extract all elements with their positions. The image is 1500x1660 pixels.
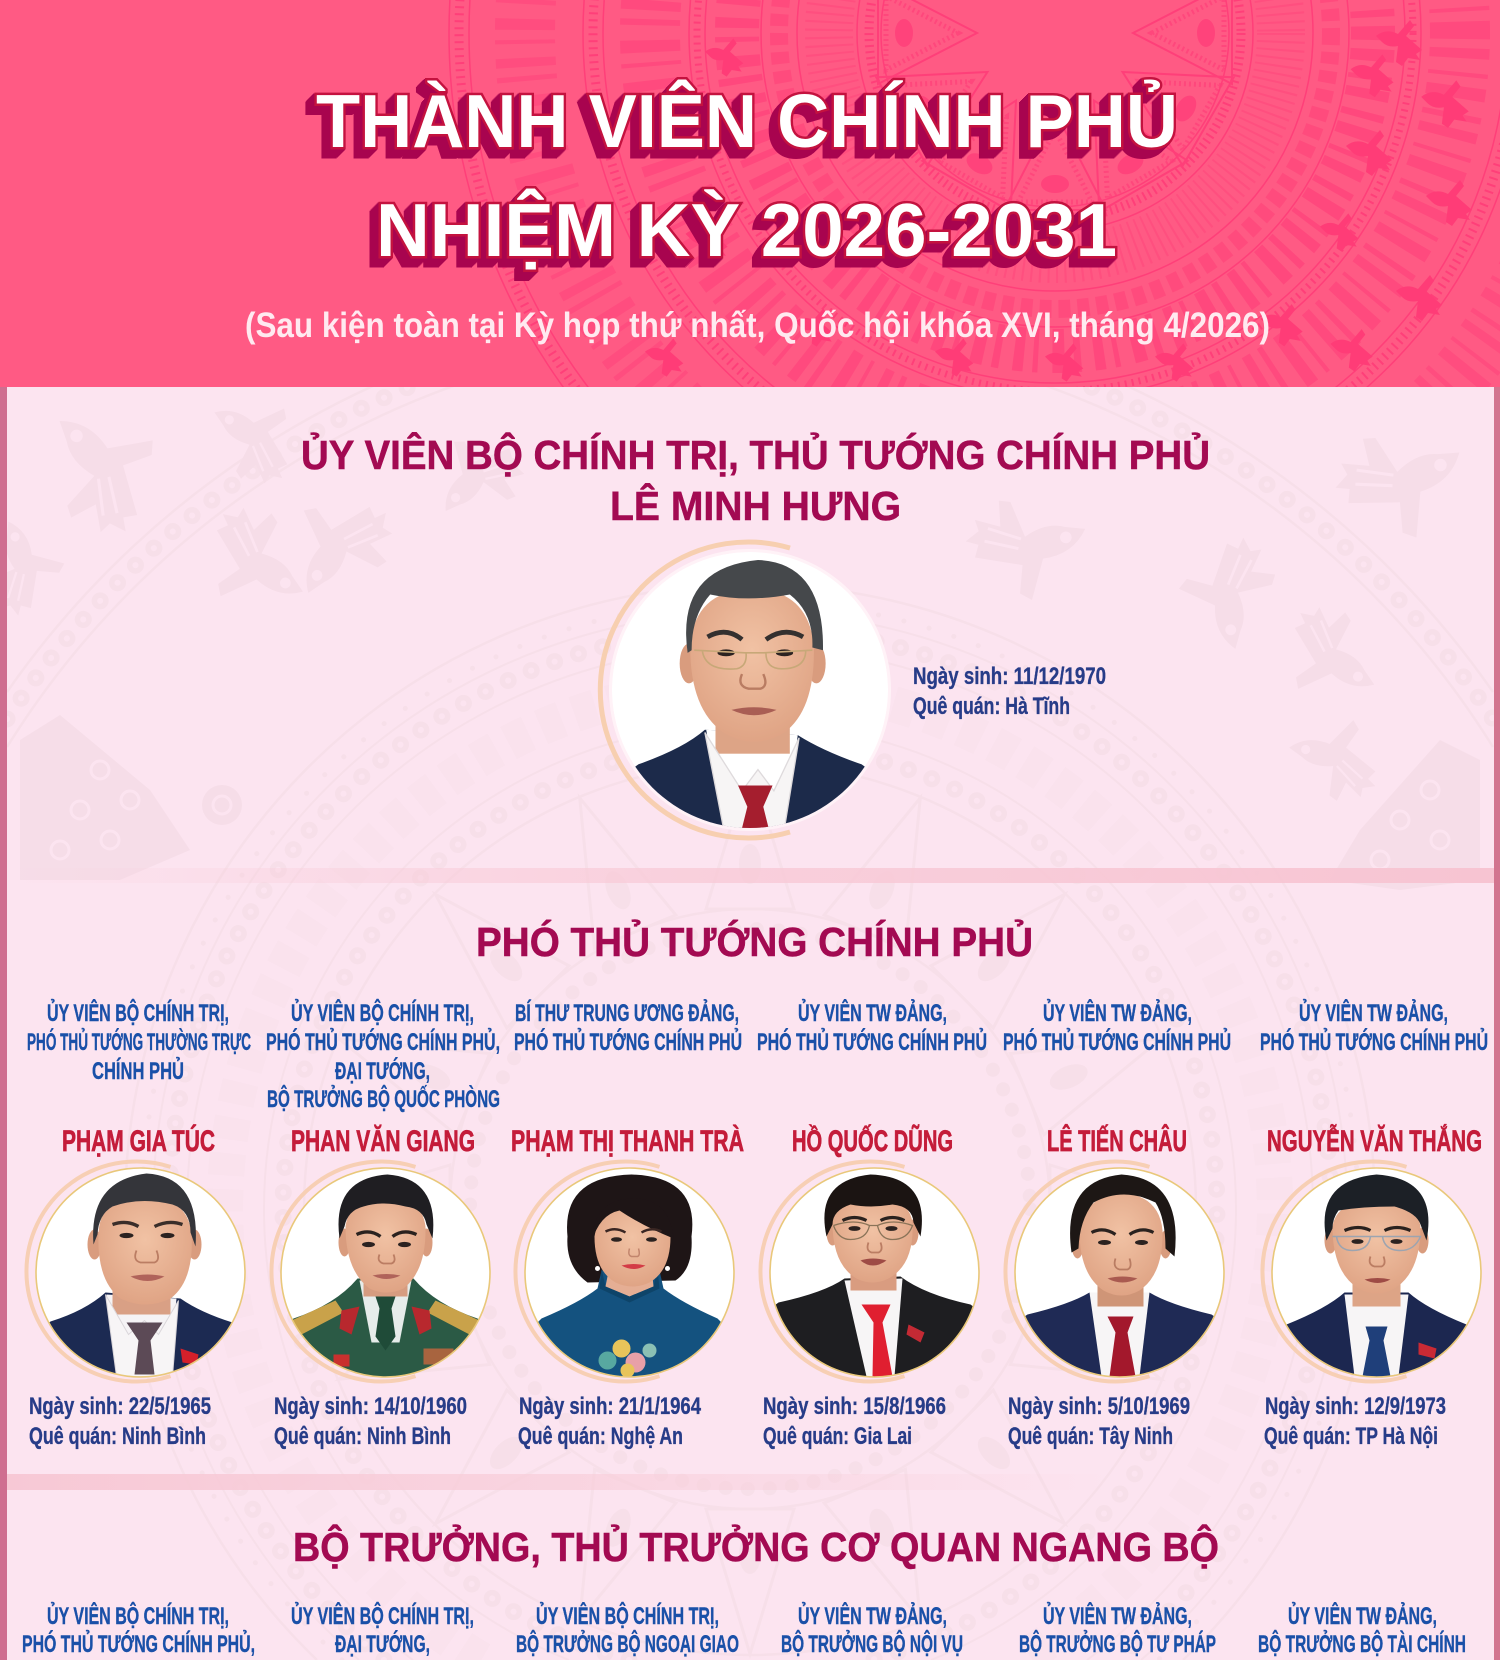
role: minister column 5: BỘ TRƯỞNG BỘ TƯ PHÁP [1019,1629,1216,1658]
role: minister column 4 [781,1601,963,1658]
role: minister column 5: ỦY VIÊN TW ĐẢNG, [1043,1601,1192,1630]
name: PHẠM GIA TÚC [62,1124,215,1158]
role: minister column 2: ĐẠI TƯỚNG, [335,1630,430,1658]
title [316,79,1178,272]
member: Phan Văn Giang [266,998,500,1450]
role: minister column 4: BỘ TRƯỞNG BỘ NỘI VỤ [781,1629,963,1658]
member: Phạm Thị Thanh Trà [511,998,744,1450]
role: minister column 2 [291,1601,474,1658]
role: minister column 6 [1258,1601,1466,1658]
role: minister column 3: BỘ TRƯỞNG BỘ NGOẠI GIAO [516,1629,739,1658]
birth and hometown [29,1393,211,1450]
panel: header background [0,0,1500,387]
birth and hometown: Quê quán: Nghệ An [518,1423,683,1450]
role text: ỦY VIÊN TW ĐẢNG, [798,998,947,1027]
birth and hometown: Ngày sinh: 15/8/1966 [763,1393,946,1420]
role text [27,998,251,1085]
portrait [26,1162,245,1382]
birth and hometown: Ngày sinh: 21/1/1964 [519,1393,701,1420]
role text: PHÓ THỦ TƯỚNG CHÍNH PHỦ [757,1027,987,1056]
portrait [760,1162,979,1382]
role: minister column 1: PHÓ THỦ TƯỚNG CHÍNH PHỦ, [22,1629,255,1658]
birth and hometown: Quê quán: Ninh Bình [274,1423,451,1450]
role text: PHÓ THỦ TƯỚNG CHÍNH PHỦ [514,1027,742,1056]
name: PHAN VĂN GIANG [291,1124,475,1158]
heading: ministers: BỘ TRƯỞNG, THỦ TRƯỞNG CƠ QUAN NGANG BỘ [293,1524,1219,1570]
heading: prime minister [301,432,1210,529]
role text [1003,998,1231,1056]
birth and hometown [274,1393,467,1450]
role: minister column 3: ỦY VIÊN BỘ CHÍNH TRỊ, [536,1601,719,1630]
role text: CHÍNH PHỦ [92,1056,184,1085]
role text: ỦY VIÊN BỘ CHÍNH TRỊ, [291,998,474,1027]
role: minister column 2: ỦY VIÊN BỘ CHÍNH TRỊ, [291,1601,474,1630]
role text: ỦY VIÊN TW ĐẢNG, [1043,998,1192,1027]
role text [757,998,987,1056]
info: Lê Minh Hưng [913,663,1106,720]
birth and hometown: Quê quán: Tây Ninh [1008,1423,1173,1450]
birth and hometown: Ngày sinh: 22/5/1965 [29,1393,211,1420]
role: minister column 1: ỦY VIÊN BỘ CHÍNH TRỊ, [47,1601,229,1630]
role: minister column 3 [516,1601,739,1658]
role text [514,998,742,1056]
portrait [271,1162,490,1382]
portrait [515,1162,734,1382]
subtitle: (Sau kiện toàn tại Kỳ họp thứ nhất, Quốc hội khóa XVI, tháng 4/2026) [245,306,1270,345]
role: minister column 1 [22,1601,255,1658]
name: PHẠM THỊ THANH TRÀ [511,1124,744,1158]
role text [266,998,500,1113]
title: THÀNH VIÊN CHÍNH PHỦ [316,79,1178,163]
heading: deputy prime ministers: PHÓ THỦ TƯỚNG CHÍNH PHỦ [476,919,1033,965]
role text: ĐẠI TƯỚNG, [335,1057,430,1085]
portrait [1262,1162,1481,1382]
info: Lê Minh Hưng: Quê quán: Hà Tĩnh [913,693,1070,720]
birth and hometown: Ngày sinh: 5/10/1969 [1008,1393,1190,1420]
role text: BỘ TRƯỞNG BỘ QUỐC PHÒNG [267,1084,500,1113]
info: Lê Minh Hưng: Ngày sinh: 11/12/1970 [913,663,1106,690]
portrait: Lê Minh Hưng [600,542,891,838]
role: minister column 5 [1019,1601,1216,1658]
role text: PHÓ THỦ TƯỚNG THƯỜNG TRỰC [27,1027,251,1056]
role text: PHÓ THỦ TƯỚNG CHÍNH PHỦ, [266,1027,500,1056]
name: HỒ QUỐC DŨNG [792,1124,953,1158]
birth and hometown: Quê quán: Gia Lai [763,1423,912,1450]
name: LÊ TIẾN CHÂU [1047,1124,1187,1158]
role text: ỦY VIÊN BỘ CHÍNH TRỊ, [47,998,229,1027]
member: Nguyễn Văn Thắng [1260,998,1488,1450]
divider bands [7,868,1500,883]
birth and hometown: Quê quán: Ninh Bình [29,1423,206,1450]
role: minister column 4: ỦY VIÊN TW ĐẢNG, [798,1601,947,1630]
member: Phạm Gia Túc [26,998,251,1450]
portrait [1005,1162,1224,1382]
member: Lê Tiến Châu [1003,998,1231,1450]
role text: PHÓ THỦ TƯỚNG CHÍNH PHỦ [1003,1027,1231,1056]
birth and hometown: Ngày sinh: 14/10/1960 [274,1393,467,1420]
role text: BÍ THƯ TRUNG ƯƠNG ĐẢNG, [515,998,739,1027]
role text [1260,998,1488,1056]
birth and hometown [763,1393,946,1450]
heading: prime minister: ỦY VIÊN BỘ CHÍNH TRỊ, THỦ TƯỚNG CHÍNH PHỦ [301,432,1210,478]
birth and hometown [1008,1393,1190,1450]
title: NHIỆM KỲ 2026-2031 [376,188,1117,272]
member: Hồ Quốc Dũng [757,998,987,1450]
birth and hometown: Quê quán: TP Hà Nội [1264,1423,1438,1450]
birth and hometown [518,1393,701,1450]
birth and hometown [1264,1393,1446,1450]
birth and hometown: Ngày sinh: 12/9/1973 [1265,1393,1446,1420]
heading: prime minister: LÊ MINH HƯNG [610,483,901,529]
